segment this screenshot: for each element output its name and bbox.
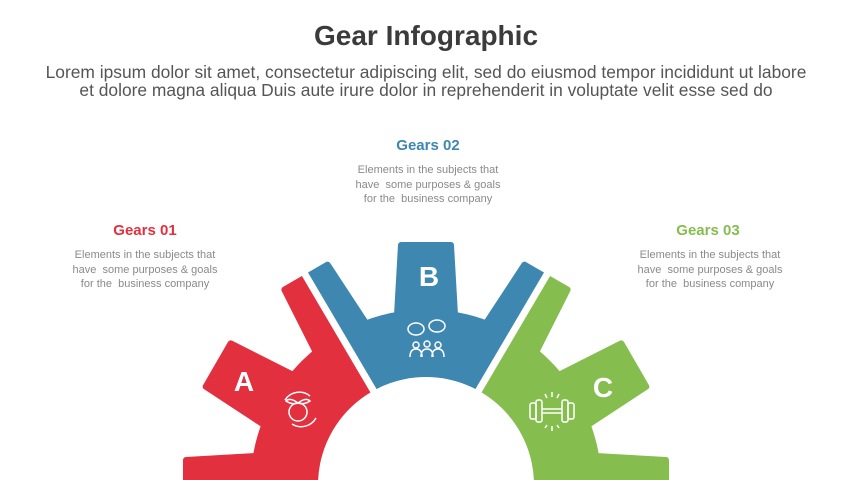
letter C: C xyxy=(593,372,613,403)
text: gears 01: have some purposes & goals xyxy=(73,264,217,276)
heading: gears 02: Gears 02 xyxy=(396,137,460,154)
segment A xyxy=(183,276,370,480)
title: Gear Infographic xyxy=(314,20,538,51)
icon: dumbbell xyxy=(530,392,574,431)
subtitle xyxy=(46,62,806,100)
text: gears 01: for the business company xyxy=(81,278,209,290)
text: gears 02 xyxy=(356,164,500,205)
gear chart xyxy=(183,242,669,480)
subtitle: Lorem ipsum dolor sit amet, consectetur adipiscing elit, sed do eiusmod tempor incididunt ut labore xyxy=(46,62,806,82)
text: gears 02: Elements in the subjects that xyxy=(358,164,498,176)
text: gears 03 xyxy=(638,249,782,290)
heading: gears 03: Gears 03 xyxy=(676,222,740,239)
icon: plant globe xyxy=(285,392,316,427)
icon: chat people xyxy=(408,320,445,357)
text: gears 02: for the business company xyxy=(364,193,492,205)
text: gears 02: have some purposes & goals xyxy=(356,178,500,190)
subtitle: et dolore magna aliqua Duis aute irure dolor in reprehenderit in voluptate velit esse sed do xyxy=(79,80,773,100)
text: gears 03: Elements in the subjects that xyxy=(640,249,780,261)
letter A: A xyxy=(234,366,254,397)
heading: gears 01: Gears 01 xyxy=(113,222,177,239)
letter B: B xyxy=(419,261,439,292)
text: gears 01 xyxy=(73,249,218,290)
segment B xyxy=(308,242,544,389)
text: gears 03: have some purposes & goals xyxy=(638,264,782,276)
text: gears 03: for the business company xyxy=(646,278,774,290)
text: gears 01: Elements in the subjects that xyxy=(75,249,215,261)
segment C xyxy=(482,276,669,480)
